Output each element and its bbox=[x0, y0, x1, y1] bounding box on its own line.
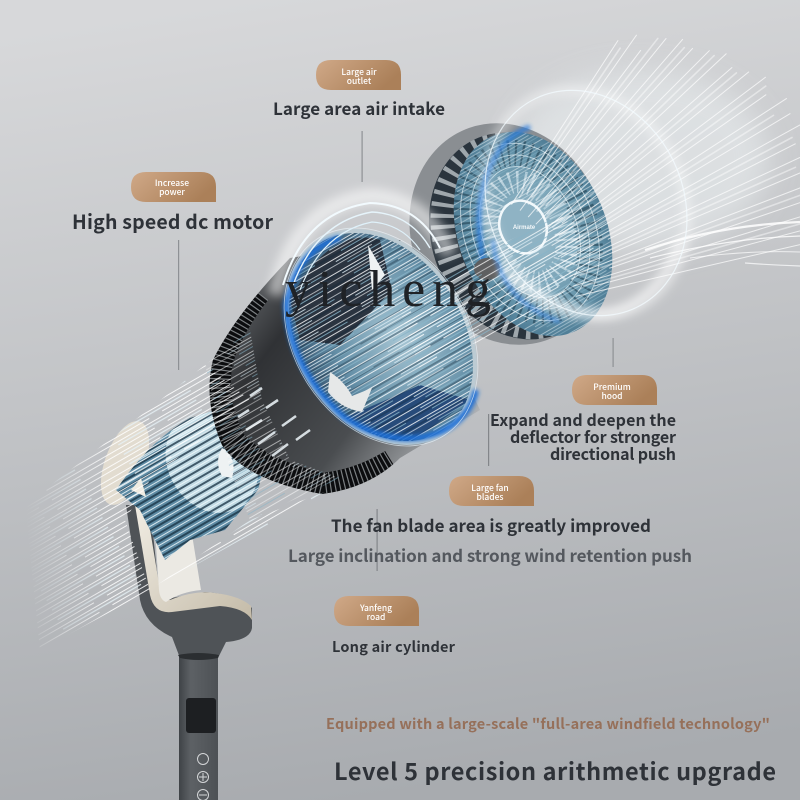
rear fan hub badge: Airmate bbox=[513, 225, 536, 231]
fan blades seen at rim bbox=[416, 122, 620, 350]
dark airflow stripes bbox=[150, 400, 240, 556]
vent highlights bbox=[238, 388, 310, 456]
wind streaks leaving the right fan bbox=[512, 35, 800, 296]
callout: large fan blades: Large inclination and strong wind retention push bbox=[288, 542, 692, 567]
callout: increase power: High speed dc motor bbox=[72, 206, 273, 235]
wind streaks crossing centre bbox=[400, 215, 600, 370]
motor body cylinder bbox=[210, 240, 480, 494]
callout: large air outlet bbox=[273, 60, 445, 182]
glow ring: front fan bbox=[275, 196, 450, 295]
callout: increase power bbox=[72, 172, 273, 370]
callout: large air outlet: Large area air intake bbox=[273, 95, 445, 120]
callout: large fan blades: blades bbox=[476, 491, 504, 503]
callout: large fan blades: Large fan bbox=[471, 482, 509, 494]
control buttons bbox=[198, 754, 208, 800]
callout: large fan blades bbox=[288, 476, 692, 571]
footer headline: Level 5 precision arithmetic upgrade bbox=[334, 753, 776, 787]
rear fan face bbox=[425, 108, 641, 360]
bracket: grey yoke with cream inlay bbox=[126, 505, 252, 660]
callout: premium hood: Expand and deepen the bbox=[490, 407, 676, 431]
callout: large air outlet: Large air bbox=[341, 66, 377, 78]
blue rim arc bbox=[286, 238, 476, 438]
callout: increase power: Increase bbox=[155, 177, 189, 189]
vent grille bbox=[218, 292, 392, 486]
callout: yanfeng road: Yanfeng bbox=[359, 602, 392, 614]
soft haze behind right-hand airflow bbox=[510, 70, 770, 250]
watermark: yicheng bbox=[285, 261, 491, 318]
rear fan hub badge bbox=[491, 193, 555, 261]
footer note: Equipped with a large-scale "full-area windfield technology" bbox=[326, 713, 770, 734]
rear fan: hood housing bbox=[409, 122, 612, 345]
callout: premium hood: Premium bbox=[593, 381, 631, 393]
callout: yanfeng road: road bbox=[367, 611, 385, 623]
callout: premium hood: hood bbox=[601, 390, 623, 402]
callout: yanfeng road: Long air cylinder bbox=[332, 636, 456, 657]
centre joint knob bbox=[474, 258, 500, 280]
curved streaks at right edge bbox=[645, 222, 800, 266]
wind streaks around bracket and pivot bbox=[25, 330, 340, 650]
callout: large air outlet: outlet bbox=[347, 75, 372, 87]
cream panel bbox=[155, 510, 201, 602]
stand: pole with display and buttons bbox=[179, 656, 218, 800]
callout: yanfeng road bbox=[332, 596, 456, 657]
callout: premium hood bbox=[488, 338, 676, 466]
front fan: ring and interior bbox=[280, 228, 482, 446]
callout: premium hood: directional push bbox=[550, 441, 676, 465]
display window bbox=[186, 698, 216, 733]
callout: increase power: power bbox=[159, 186, 185, 198]
bracket head with pivot disc bbox=[101, 411, 262, 560]
callout: premium hood: deflector for stronger bbox=[510, 424, 676, 448]
callout: large fan blades: The fan blade area is greatly improved bbox=[331, 512, 651, 537]
glow ring: right fan bbox=[448, 56, 724, 350]
